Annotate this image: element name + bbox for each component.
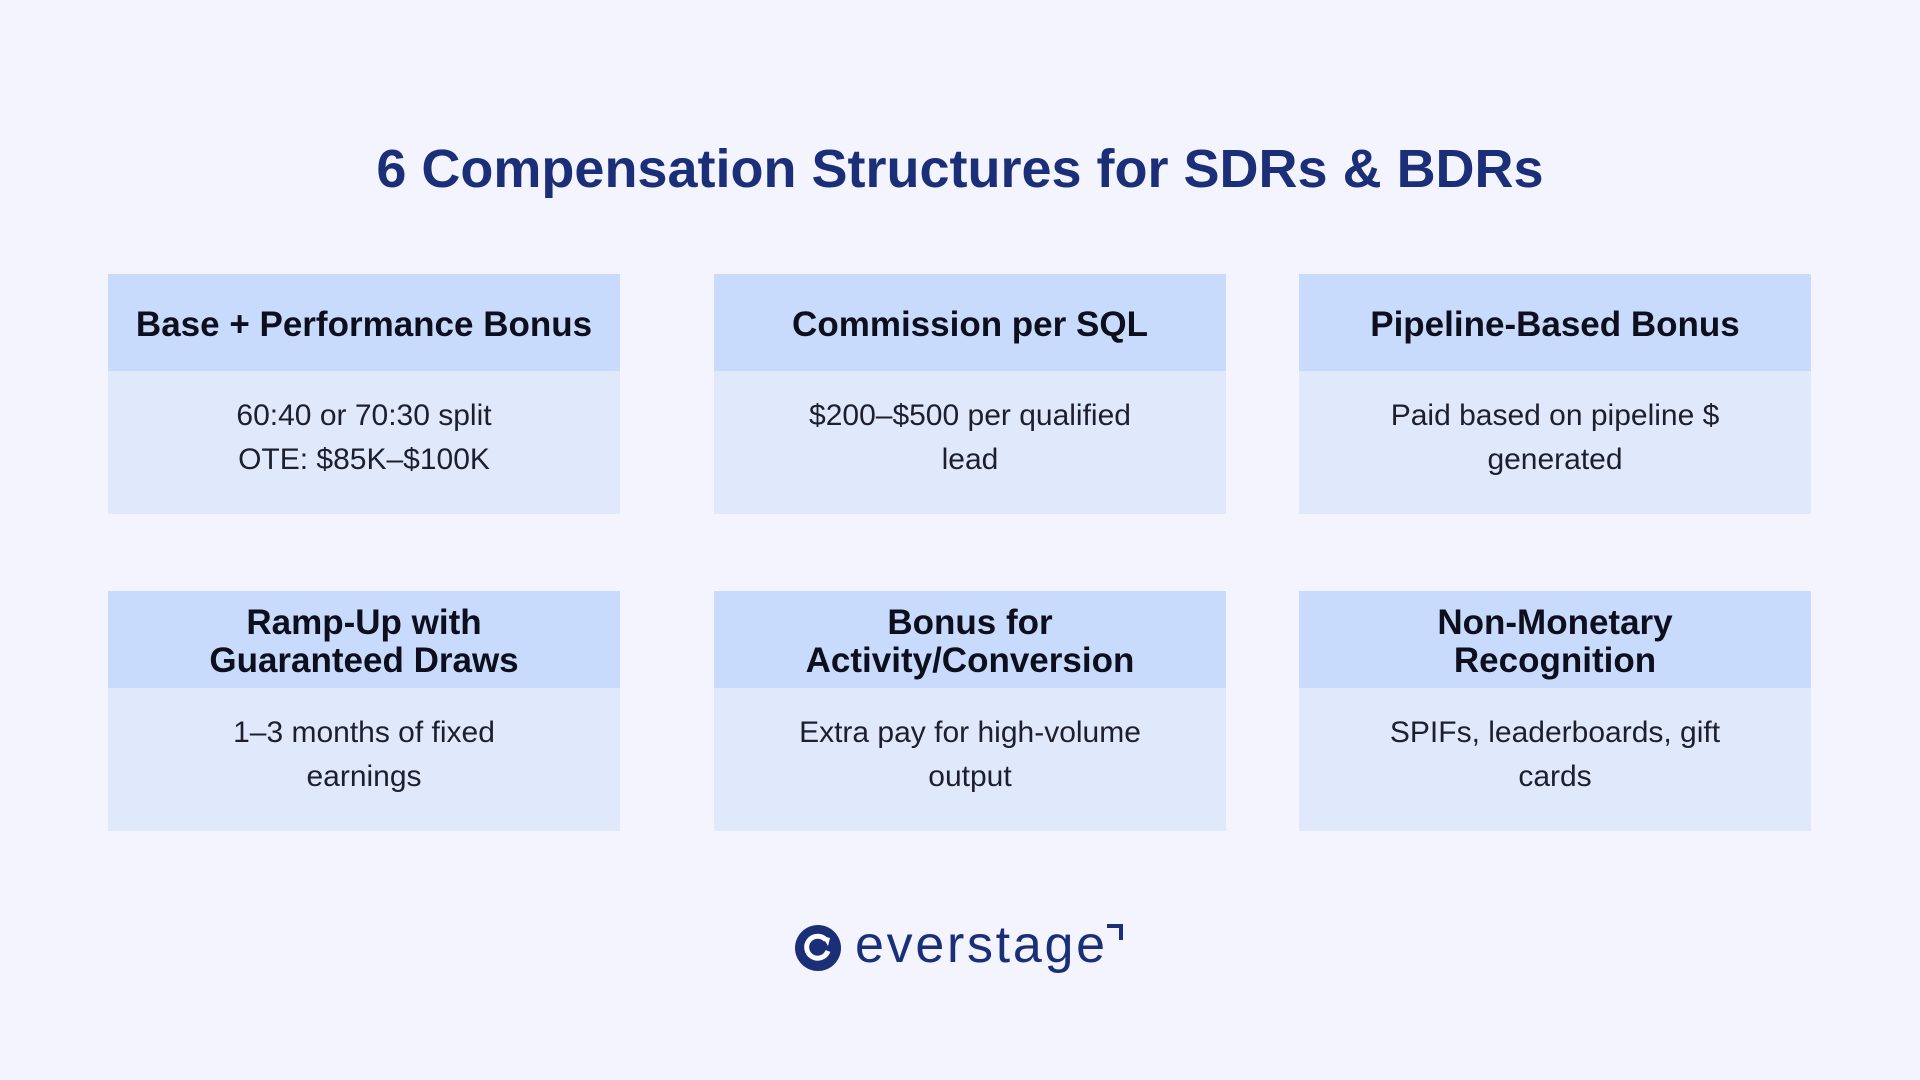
card: base + performance bonus: Base + Performance Bonus xyxy=(136,304,592,344)
card: ramp-up xyxy=(108,591,620,831)
card: commission per SQL: $200–$500 per qualified xyxy=(809,399,1131,432)
card: pipeline-based bonus: generated xyxy=(1487,443,1623,476)
card: base + performance bonus: 60:40 or 70:30 split xyxy=(236,399,492,432)
card: activity bonus: output xyxy=(928,760,1012,793)
card: activity bonus: Extra pay for high-volume xyxy=(799,716,1141,749)
card: ramp-up: Ramp-Up with xyxy=(246,602,482,642)
card: non-monetary: SPIFs, leaderboards, gift xyxy=(1390,716,1720,749)
card: pipeline-based bonus: Paid based on pipeline $ xyxy=(1391,399,1719,432)
card: commission per SQL: Commission per SQL xyxy=(792,304,1148,344)
card: pipeline-based bonus xyxy=(1299,274,1811,514)
card: commission per SQL xyxy=(714,274,1226,514)
card: base + performance bonus: OTE: $85K–$100K xyxy=(238,443,490,476)
card: non-monetary xyxy=(1299,591,1811,831)
title: 6 Compensation Structures for SDRs & BDRs xyxy=(376,139,1544,199)
card: ramp-up: 1–3 months of fixed xyxy=(233,716,495,749)
card: non-monetary: Recognition xyxy=(1454,640,1656,680)
card: pipeline-based bonus: Pipeline-Based Bonus xyxy=(1370,304,1740,344)
card: non-monetary: cards xyxy=(1518,760,1592,793)
card: activity bonus: Activity/Conversion xyxy=(806,640,1134,680)
card: activity bonus xyxy=(714,591,1226,831)
card: activity bonus: Bonus for xyxy=(887,602,1053,642)
card: ramp-up: Guaranteed Draws xyxy=(209,640,519,680)
card: base + performance bonus xyxy=(108,274,620,514)
card: commission per SQL: lead xyxy=(942,443,998,476)
card: ramp-up: earnings xyxy=(306,760,422,793)
card: non-monetary: Non-Monetary xyxy=(1437,602,1673,642)
